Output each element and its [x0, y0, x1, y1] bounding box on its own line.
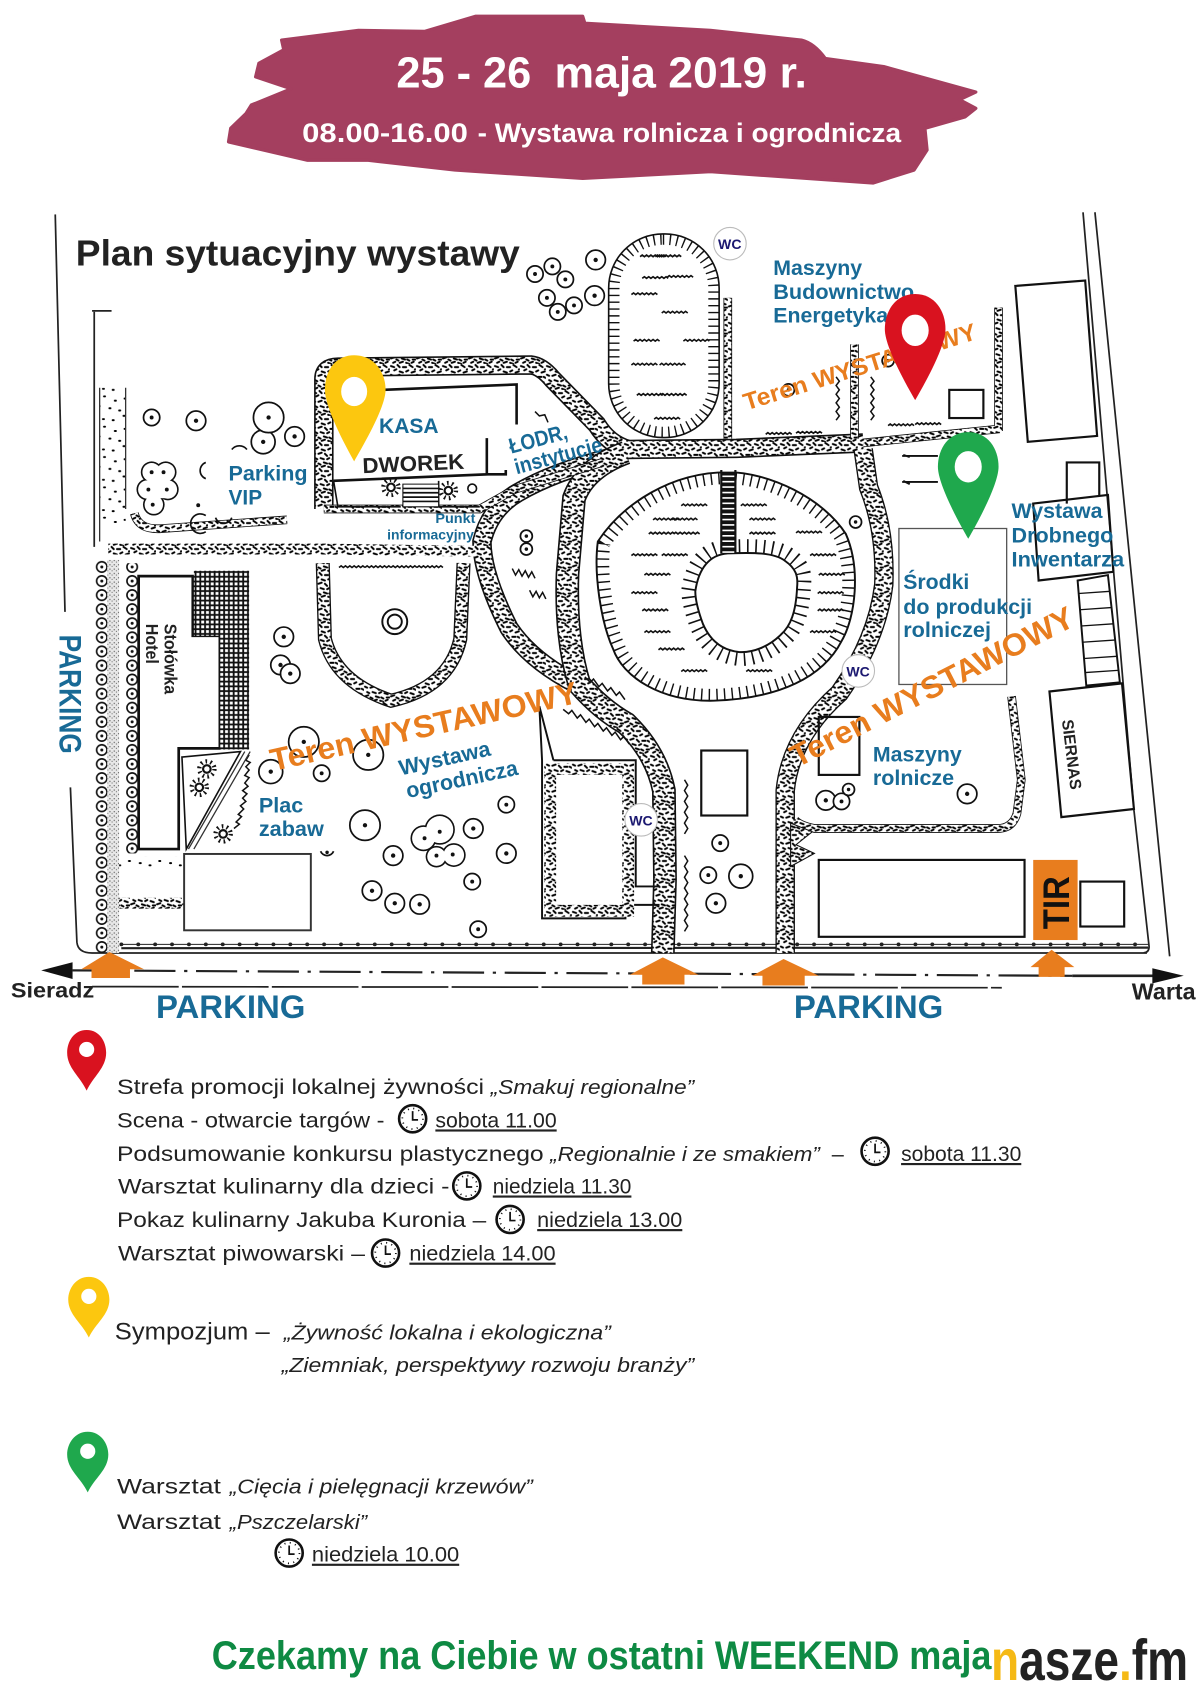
label: Parking VIP: Parking	[229, 460, 308, 485]
text: scena	[117, 1105, 557, 1132]
icon: yellow map pin	[325, 355, 386, 461]
arrow: entrance 1	[81, 952, 144, 978]
label: parking vertical: PARKING	[53, 635, 88, 754]
label: Wystawa Drobnego Inwentarza	[1012, 498, 1125, 571]
label: Wystawa ogrodnicza: ogrodnicza	[404, 755, 521, 803]
text: warsztat kulinarny: Warsztat kulinarny dla dzieci -	[118, 1173, 449, 1198]
label: ŁODR, instytucje: instytucje	[511, 432, 605, 479]
text: warsztat ciecia: Warsztat	[117, 1473, 221, 1498]
text: warsztat kulinarny: niedziela 11.30	[493, 1173, 631, 1198]
label: Parking VIP	[229, 460, 308, 510]
label: Środki do produkcji rolniczej: do produkcji	[903, 594, 1032, 619]
text: godzina warsztatu: niedziela 10.00	[312, 1542, 459, 1567]
label: parking left: PARKING	[156, 989, 305, 1025]
label: Teren wystawowy, left: Teren WYSTAWOWY	[267, 675, 581, 778]
label: Punkt informacyjny: informacyjny	[387, 526, 474, 542]
trees	[136, 250, 977, 937]
arrow: entrance 2	[630, 957, 699, 984]
icon: WC top: WC	[718, 236, 741, 252]
text: warsztat ciecia	[117, 1473, 534, 1498]
label: Siernas: SIERNAS	[1058, 718, 1084, 791]
text: warsztat ciecia: „Cięcia i pielęgnacji krzewów”	[228, 1475, 534, 1498]
TIR parking marker	[1033, 860, 1078, 940]
icon: red pin legend	[67, 1030, 106, 1091]
arrow: entrance 4	[1030, 950, 1074, 977]
label: Maszyny Budownictwo Energetyka: Maszyny	[773, 255, 862, 280]
label: Parking VIP: VIP	[229, 485, 262, 510]
panel: green zone programme	[67, 1432, 534, 1567]
label: Plac zabaw: Plac	[259, 792, 303, 817]
text: strefa promocji: Strefa promocji lokalnej żywności	[117, 1074, 484, 1099]
top oval lawn	[609, 234, 719, 438]
text: scena: sobota 11.00	[435, 1107, 557, 1132]
text: podsumowanie konkursu: sobota 11.30	[901, 1141, 1021, 1166]
label: Stołówka Hotel	[142, 624, 181, 695]
text: pokaz kulinarny: Pokaz kulinarny Jakuba Kuronia –	[117, 1207, 487, 1232]
text: podsumowanie konkursu: Podsumowanie konkursu plastycznego	[117, 1141, 544, 1166]
label: Dworek: DWOREK	[362, 449, 465, 478]
building hatching	[184, 484, 1120, 930]
text: strefa promocji: „Smakuj regionalne”	[490, 1076, 695, 1099]
label: Środki do produkcji rolniczej: rolniczej	[903, 617, 991, 642]
label: Środki do produkcji rolniczej	[903, 569, 1032, 642]
grass marks	[234, 377, 941, 931]
text: podsumowanie konkursu: –	[832, 1141, 845, 1166]
label: Wystawa ogrodnicza	[396, 736, 521, 803]
text: sympozjum	[115, 1319, 696, 1377]
icon: WC lower	[625, 804, 657, 836]
label: Wystawa ogrodnicza: Wystawa	[396, 736, 494, 780]
text: podsumowanie konkursu	[117, 1138, 1021, 1166]
text: sympozjum: „Ziemniak, perspektywy rozwoju branży”	[280, 1354, 696, 1377]
label: Wystawa Drobnego Inwentarza: Wystawa	[1012, 498, 1103, 523]
icon: green map pin	[938, 432, 999, 539]
frame lines	[55, 212, 1170, 988]
TIR parking marker: TIR	[1036, 876, 1077, 929]
garden patch near WC	[539, 706, 660, 918]
label: Punkt informacyjny: Punkt	[435, 510, 476, 526]
label: Teren wystawowy, right: Teren WYSTAWOWY	[784, 600, 1080, 774]
footer slogan: Czekamy na Ciebie w ostatni WEEKEND maja	[212, 1634, 992, 1678]
text: strefa promocji	[117, 1074, 695, 1099]
heading: date: 25 - 26	[396, 50, 531, 98]
icon: green pin legend	[67, 1432, 108, 1492]
label: Środki do produkcji rolniczej: Środki	[903, 569, 969, 594]
arrow: towards Sieradz	[41, 962, 73, 979]
logo: nasze.fm: nasze.fm	[991, 1629, 1188, 1693]
label: Wystawa Drobnego Inwentarza: Inwentarza	[1012, 546, 1125, 571]
text: pokaz kulinarny	[117, 1206, 682, 1233]
text: warsztat pszczelarski: „Pszczelarski”	[229, 1511, 368, 1534]
label: Maszyny Budownictwo Energetyka: Budownictwo	[773, 279, 914, 304]
label: Maszyny rolnicze: rolnicze	[873, 765, 954, 790]
text: warsztat piwowarski: Warsztat piwowarski –	[118, 1241, 366, 1266]
arrow: towards Warta	[1152, 968, 1184, 983]
central circular lawn	[597, 470, 855, 701]
icon: red map pin	[885, 294, 945, 400]
label: Teren wystawowy, top: Teren WYSTAWOWY	[740, 319, 980, 416]
text: podsumowanie konkursu: „Regionalnie i ze smakiem”	[549, 1143, 821, 1166]
label: Kasa: KASA	[379, 413, 439, 438]
text: warsztat piwowarski: niedziela 14.00	[409, 1241, 556, 1266]
label: Wystawa Drobnego Inwentarza: Drobnego	[1012, 523, 1113, 548]
panel: yellow zone programme	[68, 1277, 696, 1377]
text: pokaz kulinarny: niedziela 13.00	[537, 1207, 682, 1232]
label: Plac zabaw	[259, 792, 324, 841]
label: Warta: Warta	[1132, 979, 1196, 1005]
text: scena: Scena - otwarcie targów -	[117, 1107, 384, 1132]
icon: WC right	[842, 655, 875, 687]
left driveway bands	[94, 388, 184, 953]
road network	[108, 298, 1021, 953]
panel: red zone programme	[67, 1030, 1021, 1267]
buildings	[139, 281, 1134, 937]
subheading: hours: 08.00-16.00	[302, 117, 468, 148]
label: parking right: PARKING	[794, 989, 943, 1025]
label: Plac zabaw: zabaw	[259, 816, 324, 841]
label: Maszyny Budownictwo Energetyka	[773, 255, 914, 328]
icon: yellow pin legend	[68, 1277, 109, 1338]
text: warsztat pszczelarski	[117, 1509, 368, 1534]
icon: WC lower: WC	[629, 812, 653, 828]
banner: brush stroke with date	[229, 16, 976, 183]
label: Stołówka Hotel: Stołówka	[161, 624, 181, 695]
label: Punkt informacyjny	[387, 510, 476, 542]
panel: site map	[11, 212, 1196, 1025]
label: Maszyny rolnicze: Maszyny	[873, 741, 962, 766]
label: Sieradz: Sieradz	[11, 977, 94, 1002]
subheading: exhibition name: - Wystawa rolnicza i ogrodnicza	[478, 117, 902, 148]
heading: date month: maja 2019 r.	[555, 50, 807, 98]
label: Maszyny rolnicze	[873, 741, 962, 790]
arrow: entrance 3	[752, 959, 819, 986]
icon: WC top	[714, 227, 746, 260]
heading: map title: Plan sytuacyjny wystawy	[76, 233, 520, 273]
text: warsztat piwowarski	[118, 1240, 556, 1267]
icon: WC right: WC	[846, 663, 870, 679]
label: Maszyny Budownictwo Energetyka: Energetyka	[773, 303, 889, 328]
label: ŁODR, instytucje: ŁODR,	[506, 419, 570, 459]
text: warsztat pszczelarski: Warsztat	[117, 1509, 221, 1534]
text: warsztat kulinarny	[118, 1172, 631, 1199]
text: sympozjum: „Żywność lokalna i ekologiczna”	[283, 1322, 612, 1345]
text: sympozjum: Sympozjum –	[115, 1319, 270, 1346]
label: Stołówka Hotel: Hotel	[142, 624, 162, 664]
